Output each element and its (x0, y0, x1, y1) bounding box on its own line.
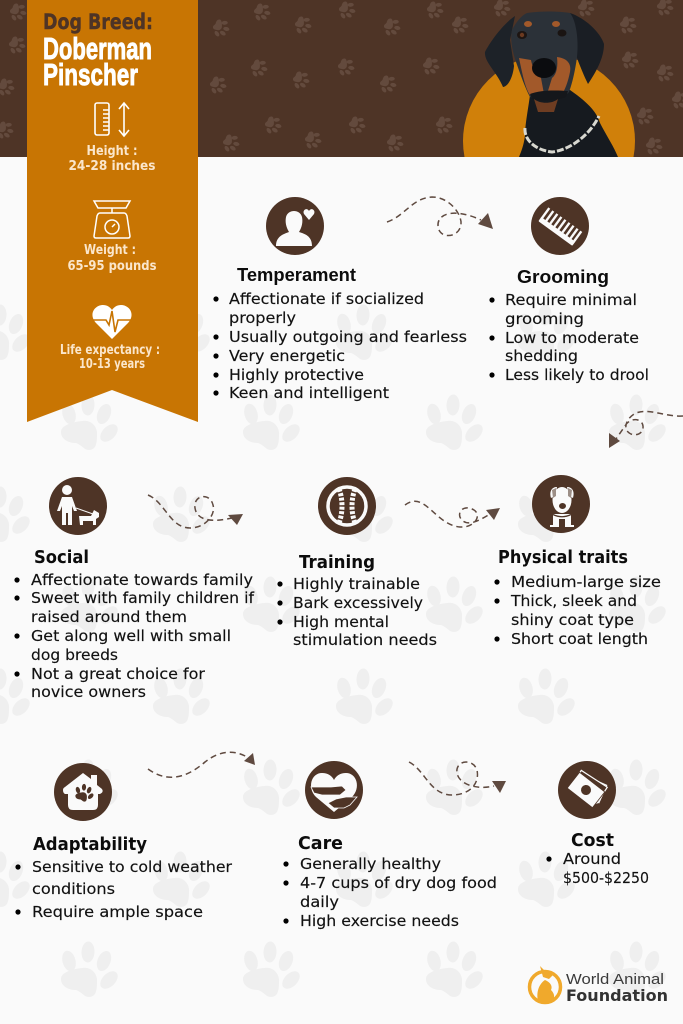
panel: adaptability (15, 763, 233, 921)
height text: Height : (86, 144, 138, 159)
heading: Grooming (517, 267, 609, 287)
ribbon panel (27, 0, 198, 422)
icon: heart with hands (305, 761, 363, 819)
bullet list: Not a great choice for (31, 665, 206, 683)
bullet list: shedding (505, 347, 578, 365)
bullet list (15, 858, 233, 921)
bullet list (546, 850, 649, 887)
bullet list: Thick, sleek and (510, 592, 637, 610)
background paw pattern (0, 304, 669, 997)
header band (0, 0, 683, 157)
icon: scale (94, 201, 130, 238)
ribbon title: Doberman (43, 31, 152, 66)
bullet list: Affectionate towards family (31, 571, 253, 589)
bullet list: Around (563, 850, 621, 868)
weight text: Weight : (84, 243, 136, 258)
logo wordmark: Foundation (566, 986, 668, 1005)
height text: 24-28 inches (68, 159, 156, 174)
bullet list: Generally healthy (300, 855, 441, 873)
bullet list: Less likely to drool (505, 366, 649, 384)
bullet list: 4-7 cups of dry dog food (300, 874, 497, 892)
bullet list: Medium-large size (511, 573, 661, 591)
bullet list: grooming (505, 310, 584, 328)
panel: physical traits (494, 475, 661, 648)
bullet list (14, 571, 255, 701)
bullet list (213, 290, 467, 402)
bullet list: Keen and intelligent (229, 384, 389, 402)
header paw pattern (0, 0, 683, 157)
bullet list: Require minimal (505, 291, 637, 309)
bullet list (277, 575, 437, 649)
icon: person walking dog (49, 477, 107, 535)
icon: dog face (532, 475, 590, 533)
bullet list: Affectionate if socialized (229, 290, 424, 308)
life expectancy text: Life expectancy : (60, 343, 160, 358)
bullet list: dog breeds (31, 646, 118, 664)
panel: grooming (489, 197, 649, 384)
arrow: grooming to social (609, 411, 683, 448)
height text (68, 144, 156, 174)
panel: training (277, 477, 437, 649)
logo: World Animal Foundation (530, 966, 668, 1005)
heading: Training (299, 553, 375, 573)
bullet list: properly (229, 309, 296, 327)
icon: heart with pulse (92, 305, 132, 339)
bullet list: Low to moderate (505, 329, 639, 347)
heading: Social (34, 548, 89, 568)
arrow: training to physical traits (405, 501, 500, 527)
heading: Cost (571, 831, 614, 851)
icon: baseball (318, 477, 376, 535)
panel: care (283, 761, 497, 930)
icon: house with paw (54, 763, 112, 821)
heading: Temperament (237, 265, 356, 285)
bullet list (494, 573, 661, 648)
weight text: 65-95 pounds (68, 259, 157, 274)
bullet list: Usually outgoing and fearless (229, 328, 467, 346)
heading: Adaptability (33, 835, 148, 855)
bullet list: High mental (293, 613, 389, 631)
bullet list: conditions (32, 880, 115, 898)
logo wordmark (566, 972, 668, 1005)
bullet list: Bark excessively (293, 594, 423, 612)
weight text (68, 243, 157, 274)
bullet list: Very energetic (229, 347, 345, 365)
panel: cost (546, 761, 649, 887)
arrow: temperament to grooming (387, 197, 493, 236)
arrow: adaptability to care (148, 752, 255, 777)
life expectancy text: 10-13 years (79, 357, 145, 372)
icon: person with heart (266, 197, 324, 255)
bullet list: Short coat length (511, 630, 648, 648)
bullet list: Highly trainable (293, 575, 420, 593)
icon: ruler and arrow (95, 103, 129, 136)
ribbon title: Dog Breed: (43, 10, 153, 34)
arrow: social to training (148, 495, 243, 528)
logo wordmark: World Animal (566, 972, 664, 988)
heading: Physical traits (498, 548, 628, 568)
bullet list: raised around them (31, 608, 187, 626)
bullet list: daily (300, 893, 339, 911)
bullet list: shiny coat type (511, 611, 634, 629)
ribbon title: Pinscher (43, 57, 138, 92)
bullet list: Require ample space (32, 903, 203, 921)
panel: temperament (213, 197, 467, 402)
bullet list: Highly protective (229, 366, 364, 384)
heading: Care (298, 834, 343, 854)
bullet list (283, 855, 497, 930)
bullet list (489, 291, 649, 384)
logo mark (530, 966, 560, 1002)
bullet list: Get along well with small (31, 627, 231, 645)
bullet list: Sweet with family children if (31, 589, 255, 607)
panel: social (14, 477, 255, 701)
icon: banknotes (558, 761, 616, 819)
life expectancy text (60, 343, 160, 372)
bullet list: $500-$2250 (563, 869, 649, 887)
bullet list: Sensitive to cold weather (32, 858, 233, 876)
icon: comb (531, 197, 589, 255)
dog portrait on orange circle (463, 12, 635, 157)
ribbon title (43, 10, 153, 92)
arrow: care to cost (409, 762, 506, 795)
bullet list: High exercise needs (300, 912, 459, 930)
bullet list: stimulation needs (293, 631, 437, 649)
bullet list: novice owners (31, 683, 146, 701)
